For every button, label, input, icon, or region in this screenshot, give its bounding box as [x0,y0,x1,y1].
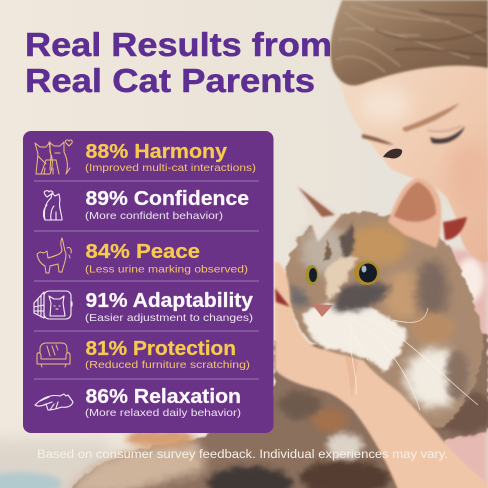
result: harmony: 88% Harmony [86,140,228,163]
result: adaptability: 91% Adaptability [86,289,254,312]
result: protection: (Reduced furniture scratching) [85,359,250,371]
footer disclaimer: Based on consumer survey feedback. Individual experiences may vary. [37,449,448,461]
result: relaxation [35,385,241,419]
title: Real Cat Parents [25,62,315,99]
cat eyes [306,261,380,285]
cat head and chest fur [283,212,483,428]
cat ears [297,178,441,248]
cat whiskers [345,308,478,410]
face [333,50,488,263]
result: adaptability: (Easier adjustment to changes) [85,312,253,324]
result: harmony [35,140,256,174]
icon: cat spraying [37,238,71,273]
result: relaxation: 86% Relaxation [86,385,241,408]
result: peace [37,238,248,276]
cat nose [312,304,333,317]
girl's arm and hand [275,262,488,488]
result: confidence: 89% Confidence [86,187,249,210]
icon: cat in carrier [34,291,72,319]
icon: sitting cat with heart [44,191,62,220]
result: relaxation: (More relaxed daily behavior) [85,407,241,419]
cat body behind arm [65,330,488,488]
result: harmony: (Improved multi-cat interactions) [85,162,256,174]
hair [330,0,488,85]
icon: lying cat [35,394,73,410]
result: peace: 84% Peace [86,240,200,263]
pink shirt [420,250,488,488]
result: confidence [44,187,249,222]
title: Real Results from [25,26,332,63]
blanket and blurred floor [0,440,110,488]
icon: scratched sofa [37,343,70,367]
girl's eyes, brows and lips [362,103,467,240]
title [25,26,332,99]
result: adaptability [34,289,254,324]
result: confidence: (More confident behavior) [85,210,223,222]
result: protection: 81% Protection [86,337,236,360]
icon: two cats with heart [35,140,72,174]
result: protection [37,337,250,371]
result: peace: (Less urine marking observed) [85,264,248,276]
panel: survey results [23,131,274,433]
